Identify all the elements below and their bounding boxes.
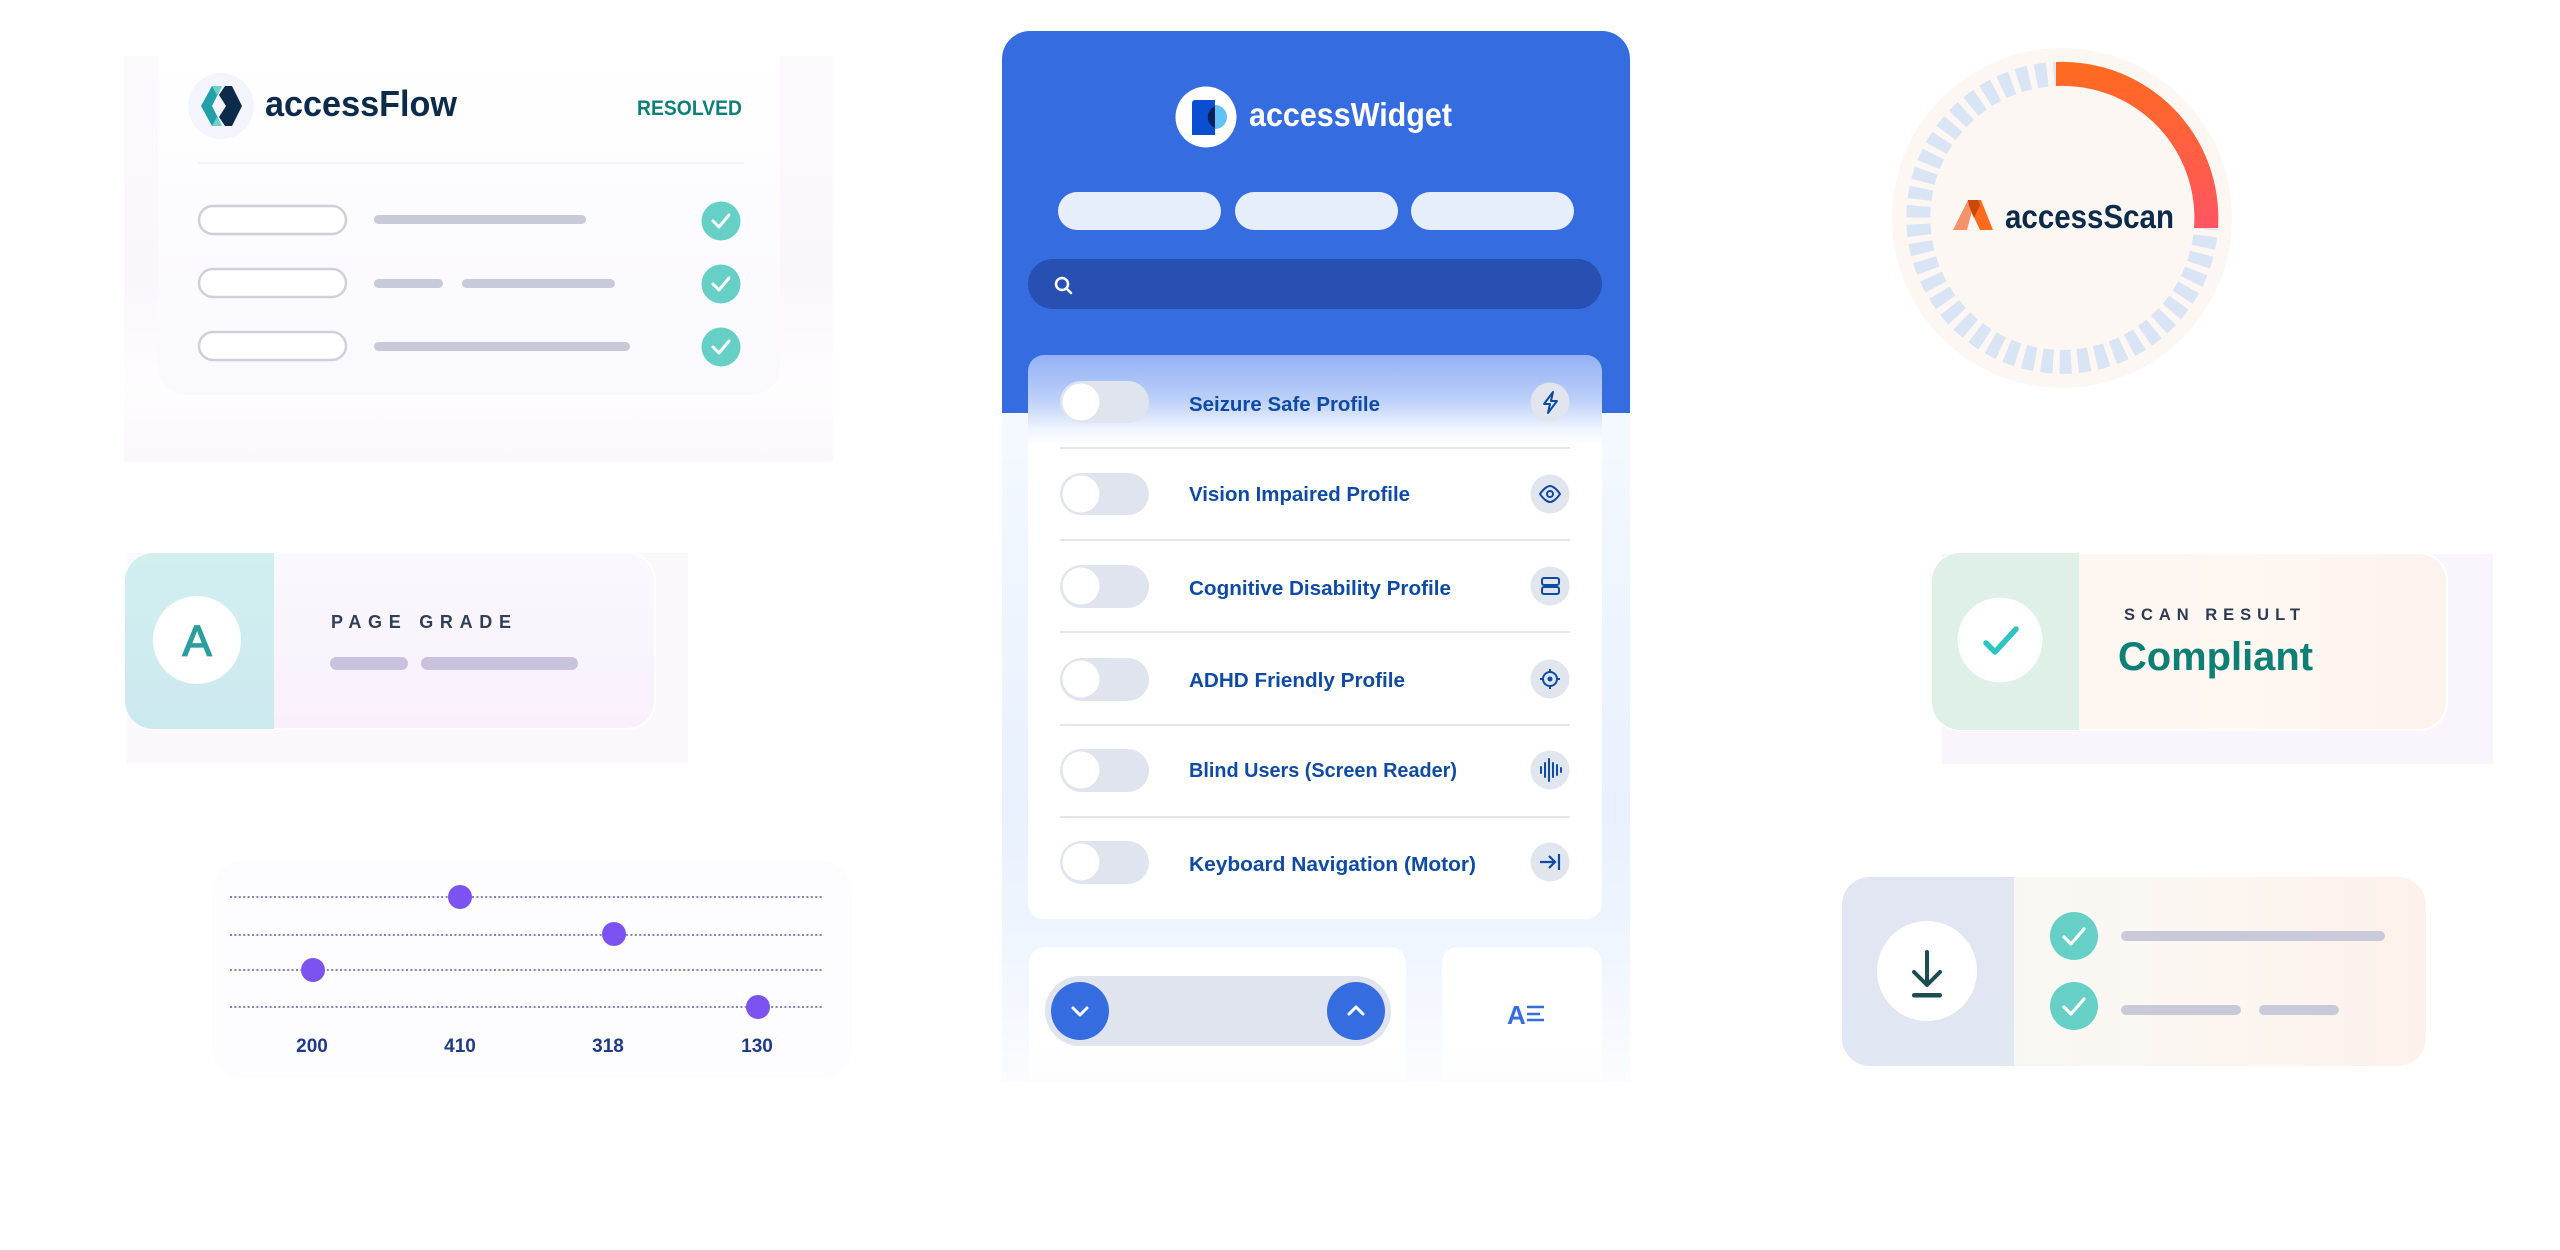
chart value labels: 410 (444, 1036, 476, 1057)
logo text: accessWidget: accessWidget (1249, 96, 1452, 133)
row: seizure safe: Seizure Safe Profile (1189, 393, 1380, 416)
row: blind users (1060, 749, 1570, 792)
tab pills (1058, 192, 1574, 230)
gauge arc (2056, 62, 2218, 228)
label: page grade: PAGE GRADE (331, 612, 511, 632)
panel: scan result card (1932, 553, 2493, 764)
chart lines (230, 897, 823, 1007)
logo text: accessFlow: accessFlow (265, 83, 458, 124)
chart value labels: 200 (296, 1036, 328, 1057)
row: report item 1 (2050, 912, 2385, 960)
chart value labels: 130 (741, 1036, 773, 1057)
row: seizure safe (1060, 381, 1570, 423)
panel: download report card (1842, 877, 2426, 1066)
profiles list card (1028, 355, 1602, 919)
panel: text alignment control: A (1507, 1000, 1526, 1030)
icon: download (1877, 921, 1977, 1021)
value: compliant: Compliant (2118, 635, 2313, 679)
panel: accessWidget (1002, 31, 1630, 1081)
search bar (1028, 259, 1602, 309)
row: blind users: Blind Users (Screen Reader) (1189, 759, 1457, 782)
panel: text alignment control (1442, 947, 1602, 1081)
row: cognitive disability: Cognitive Disability Profile (1189, 577, 1451, 600)
grade badge: A (182, 617, 212, 666)
panel: accessScan gauge (1892, 48, 2232, 388)
gauge ticks (1918, 74, 2206, 362)
chart value labels (296, 1036, 773, 1057)
row: ADHD friendly: ADHD Friendly Profile (1189, 669, 1405, 692)
row: report item 2 (2050, 982, 2339, 1030)
grade badge (153, 596, 241, 684)
panel: dotted chart (212, 862, 852, 1077)
row: issue 3 (199, 328, 740, 366)
status: resolved: RESOLVED (637, 97, 742, 120)
row: cognitive disability (1060, 565, 1570, 608)
placeholder bars (330, 657, 578, 670)
icon: accessWidget logo (1176, 86, 1236, 148)
chart value labels: 318 (592, 1036, 624, 1057)
panel: page grade card (125, 553, 688, 763)
row: keyboard navigation (1060, 841, 1570, 884)
panel: accessFlow resolved card (124, 56, 833, 462)
chart dots (301, 885, 770, 1019)
row: keyboard navigation: Keyboard Navigation (Motor) (1189, 853, 1476, 876)
icon: accessScan logo (1953, 200, 1993, 230)
row: vision impaired (1060, 473, 1570, 515)
row: ADHD friendly (1060, 658, 1570, 701)
row: issue 1 (199, 202, 740, 240)
panel: content scaling control (1029, 947, 1406, 1081)
icon: check badge (1958, 598, 2042, 682)
icon: accessFlow logo (188, 73, 254, 139)
logo text: accessScan: accessScan (2005, 198, 2174, 235)
label: scan result: SCAN RESULT (2124, 606, 2300, 624)
row: issue 2 (199, 264, 740, 304)
row: vision impaired: Vision Impaired Profile (1189, 483, 1410, 506)
